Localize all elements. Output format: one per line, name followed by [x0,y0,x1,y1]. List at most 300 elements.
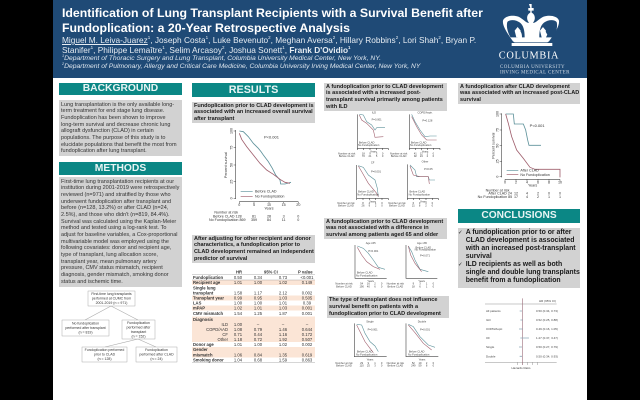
table: Cox multivariable model: 0.99 [234,296,243,300]
charts: Kaplan-Meier by age and transplant type: Before CLAD [387,364,403,368]
chart: overall survival Kaplan-Meier: Number at risk [214,211,238,215]
charts: Kaplan-Meier by diagnosis: 41 [414,152,417,156]
charts: Kaplan-Meier by age and transplant type: No Fundoplication [356,273,378,277]
chart: post-CLAD survival Kaplan-Meier: 4 [526,195,528,199]
text block: methods: underwent fundoplication after transplant and [61,199,171,205]
text block: conclusions: benefit from a fundoplication [466,276,561,284]
table: Cox multivariable model: 0.619 [302,352,313,358]
flowchart: First-time lung transplants [91,292,132,296]
charts: Kaplan-Meier by diagnosis: 92 [414,154,417,158]
charts: Kaplan-Meier by age and transplant type: 0 [381,364,383,368]
chart: post-CLAD survival Kaplan-Meier: Percent survival [491,132,495,159]
table: Cox multivariable model: Gender [193,347,208,352]
authors [62,35,476,55]
charts: Kaplan-Meier by diagnosis: Years [420,199,427,203]
charts: Kaplan-Meier by age and transplant type: Number at risk [335,282,353,286]
chart: overall survival Kaplan-Meier: 15 [282,203,286,207]
charts: Kaplan-Meier by diagnosis: No Fundoplication [410,143,432,147]
text block: methods: pressure, CMV status mismatch, recipient [61,265,163,271]
text block: conclusions: CLAD development is associated [466,236,574,244]
charts: Kaplan-Meier by diagnosis: Before CLAD [359,140,375,144]
chart: overall survival Kaplan-Meier: 20 [296,203,300,207]
chart: post-CLAD survival Kaplan-Meier: 12 [514,192,518,196]
charts: Kaplan-Meier by diagnosis: 6 [413,201,415,205]
heading: conclusions [458,209,580,222]
table: Cox multivariable model: Transplant year [193,296,224,300]
charts: Kaplan-Meier by diagnosis: 3 [419,201,421,205]
subheading: type of transplant [327,296,449,318]
chart: post-CLAD survival Kaplan-Meier: 2 [537,195,539,199]
chart: overall survival Kaplan-Meier: 0 [297,214,299,218]
charts: Kaplan-Meier by diagnosis: ILD [372,110,376,114]
subheading: overall survival: associated with an increased overall survival [194,109,313,115]
table: Cox multivariable model: 0.44 [254,332,263,337]
chart: post-CLAD survival Kaplan-Meier: 25 [496,159,500,163]
flowchart: (n = 152) [131,334,146,338]
charts: Kaplan-Meier by diagnosis: 9 [369,152,371,156]
charts: Kaplan-Meier by age and transplant type: 1 [426,282,428,286]
table: Cox multivariable model: transplant [193,290,214,296]
chart: overall survival Kaplan-Meier: P<0.001 [264,135,280,140]
chart: post-CLAD survival Kaplan-Meier: 2 [515,180,517,184]
table: Cox multivariable model: 1.59 [279,358,288,362]
charts: Kaplan-Meier by diagnosis: Before CLAD [411,140,427,144]
text block: conclusions: with an increased post-transplant [466,244,576,252]
chart: overall survival Kaplan-Meier: 28 [267,214,271,218]
table: Cox multivariable model: 1.04 [234,358,243,362]
table: Cox multivariable model: 0.172 [302,332,313,337]
text block: conclusions [458,228,580,288]
subheading: overall survival [192,102,315,122]
table: Cox multivariable model: 2.12 [279,290,288,296]
text block: conclusions: single and double lung transplants [466,268,580,276]
authors: Stanifer1, Philippe Lemaître1, Selim Arcasoy2, Joshua Sonett1, Frank D'Ovidio1 [62,45,351,55]
charts: Kaplan-Meier by diagnosis: Before CLAD [358,190,374,194]
table: Cox multivariable model: 0.68 [254,358,263,362]
table: Cox multivariable model: – [282,322,285,327]
charts: Kaplan-Meier by diagnosis: 21 [412,203,415,207]
charts: Kaplan-Meier by age and transplant type: P=0.001 [368,249,379,253]
text block: conclusions: ✓ [458,230,463,236]
chart: post-CLAD survival Kaplan-Meier: 50 [496,144,500,148]
flowchart: performed after transplant [65,326,106,330]
charts: Kaplan-Meier by age and transplant type: Years [418,279,426,283]
charts: Kaplan-Meier by diagnosis: 1 [375,201,377,205]
charts: Kaplan-Meier by diagnosis: 4 [369,201,371,205]
chart: overall survival Kaplan-Meier: No Fundoplication [255,195,284,199]
table: Cox multivariable model: 1.16 [279,332,288,337]
subheading: after CLAD: survival [460,97,481,103]
charts: Kaplan-Meier by diagnosis: Before CLAD [409,190,425,194]
table: Cox multivariable model: 0.002 [302,290,313,296]
charts: Kaplan-Meier by diagnosis: Before CLAD [338,203,354,207]
text block: methods: 2.5%), and those who didn't (n=819, 84.4%). [61,212,170,218]
table: Cox multivariable model: 95% CI [264,270,278,274]
chart: post-CLAD survival Kaplan-Meier: P<0.001 [530,123,545,128]
table: Cox multivariable model: 1.01 [234,342,243,347]
table: Cox multivariable model: 1.54 [234,311,243,316]
flowchart: 2001-2019 (n = 971) [96,301,127,305]
text block: conclusions: A fundoplication prior to or after [466,228,571,236]
charts: Kaplan-Meier by age and transplant type: Before CLAD [415,245,431,249]
chart: forest plot: HR (95% CI) [539,299,556,303]
flowchart: performed after [127,326,151,330]
table: Cox multivariable model: P value [298,270,313,274]
subheading: ILD: A fundoplication prior to CLAD development [326,84,443,90]
title: Fundoplication: a 20-Year Retrospective Analysis [62,20,350,34]
table: Cox multivariable model: LAS [193,300,202,306]
table: Cox multivariable model: 0.001 [302,306,313,310]
table: Cox multivariable model: Single lung [193,286,216,290]
charts: Kaplan-Meier by age and transplant type: Before CLAD [336,284,352,288]
chart: overall survival Kaplan-Meier: Before CLAD 128 [213,214,242,218]
chart: forest plot: 0.52 (0.25, 0.88) [536,318,558,322]
table: Cox multivariable model: 0.71 [234,332,243,337]
chart: overall survival Kaplan-Meier: 5 [253,203,255,207]
table: Cox multivariable model: – [257,322,260,327]
chart: overall survival Kaplan-Meier: 84 [267,218,271,222]
charts: Kaplan-Meier by age and transplant type: P=0.001 [420,327,430,331]
table: Cox multivariable model: 0.79 [254,327,263,332]
subheading: age 65: A fundoplication prior to CLAD development [326,218,443,224]
charts: Kaplan-Meier by age and transplant type: 0 [381,284,383,288]
text block: methods: type of transplant, lung allocation score, [61,252,158,258]
table: Cox multivariable model: Recipient age [193,280,221,285]
table: Cox multivariable model: 1.02 [279,280,288,285]
chart: overall survival Kaplan-Meier: 0 [238,203,240,207]
charts: Kaplan-Meier by age and transplant type: 249 [411,364,416,368]
table: Cox multivariable model: 1.17 [254,290,263,296]
charts: Kaplan-Meier by age and transplant type: 6 [419,284,421,288]
subheading: overall survival: Fundoplication prior to CLAD development is [194,102,314,108]
charts: Kaplan-Meier by diagnosis: Years [422,150,429,154]
chart: overall survival Kaplan-Meier: 0 [297,218,299,222]
text block: background: elucidate populations that benefit the most from [61,142,177,148]
charts: Kaplan-Meier by diagnosis: Before CLAD [391,154,407,158]
table: Cox multivariable model: 1.35 [279,352,288,358]
charts: Kaplan-Meier by age and transplant type: Before CLAD [387,284,403,288]
table: Cox multivariable model: 0.001 [302,311,313,316]
heading: background: BACKGROUND [83,83,158,94]
text block: background: Fundoplication has been shown to improve [61,115,166,121]
charts: Kaplan-Meier by diagnosis: 24 [420,154,423,158]
charts: Kaplan-Meier by age and transplant type: No Fundoplication [408,352,430,356]
table: Cox multivariable model: <0.001 [301,275,314,280]
charts: Kaplan-Meier by diagnosis: 26 [362,203,365,207]
chart: forest plot: 0.50 (0.34, 0.93) [536,354,558,358]
charts: Kaplan-Meier by age and transplant type: Years [367,358,374,362]
flowchart: (n = 819) [78,330,93,334]
chart: post-CLAD survival Kaplan-Meier: 0 [559,192,561,196]
charts: Kaplan-Meier by age and transplant type: Before CLAD [409,350,425,354]
charts: Kaplan-Meier by age and transplant type: 9 [413,282,415,286]
charts: Kaplan-Meier by diagnosis: Before CLAD [389,203,405,207]
table: Cox multivariable model: Other [218,337,229,342]
subheading: type of transplant: fundoplication prior to CLAD development [329,310,441,316]
subheading: ILD: is associated with a increased post- [326,90,421,96]
table: Cox multivariable model: 1.01 [234,280,243,285]
chart: overall survival Kaplan-Meier: 10 [267,203,271,207]
subheading: ILD: transplant survival primarily among patients [326,97,443,103]
text block: conclusions: ✓ [458,262,463,268]
table: Cox multivariable model: 1.03 [279,296,288,300]
charts: Kaplan-Meier by diagnosis: 2 [427,154,429,158]
text block: methods: method and tested using a log-rank test. To [61,225,166,231]
charts: Kaplan-Meier by age and transplant type: 0 [433,361,435,365]
chart: overall survival Kaplan-Meier: Percent survival [224,152,228,178]
text block: background: term treatment for end stage lung disease. [61,108,164,114]
subheading: age 65: was not associated with a difference in [326,225,429,231]
subheading: type of transplant: survival benefit on patients with a [329,304,418,310]
text block: methods: diagnosis, gender mismatch, smoking donor [61,272,169,278]
table: Cox multivariable model: COPD/AAD [206,327,228,332]
text block: methods: Survival was calculated using the Kaplan-Meier [61,219,176,225]
heading: background [59,83,182,95]
charts: Kaplan-Meier by diagnosis: 0 [432,203,434,207]
table: Cox multivariable model: 0.84 [254,352,263,358]
charts: Kaplan-Meier by age and transplant type: Age ≥65 [366,241,376,245]
charts: Kaplan-Meier by diagnosis: Before CLAD [339,154,355,158]
table: Cox multivariable model: Diagnosis [193,317,214,322]
charts: Kaplan-Meier by diagnosis: 1 [427,152,429,156]
charts: Kaplan-Meier by diagnosis: 18 [362,152,365,156]
text block: methods: reviewed (n=971) and stratified by those who [61,192,171,198]
flowchart: performed after CLAD [139,352,174,356]
charts: Kaplan-Meier by age and transplant type: 8 [426,364,428,368]
chart: overall survival Kaplan-Meier: 81 [252,214,256,218]
text block: methods: following covariates: donor and recipient age, [61,245,171,251]
text block: methods: before (n=128, 13.2%) or after CLAD (n=24, [61,205,168,211]
chart: post-CLAD survival Kaplan-Meier: 10 [558,180,562,184]
chart: post-CLAD survival Kaplan-Meier: 0 [548,192,550,196]
charts: Kaplan-Meier by age and transplant type: 16 [367,282,370,286]
charts: Kaplan-Meier by age and transplant type: Before CLAD [357,271,373,275]
heading: methods [59,162,182,175]
chart: overall survival Kaplan-Meier: 25 [230,180,234,184]
table: Cox multivariable model: 1.02 [234,306,243,310]
text block: methods: adjust for baseline variables, a Cox-proportional [61,232,177,238]
affiliations: 2Department of Pulmonary, Allergy and Critical Care Medicine, Columbia University Irving Medical Center, New York, NY [62,61,420,70]
charts: Kaplan-Meier by age and transplant type: 6 [374,284,376,288]
charts: Kaplan-Meier by diagnosis: Other [422,160,428,164]
table: Cox multivariable model: 1.00 [234,322,243,327]
icon: Columbia crown logo: IRVING MEDICAL CENTER [500,71,570,76]
charts: Kaplan-Meier by age and transplant type: 0 [381,282,383,286]
charts: Kaplan-Meier by age and transplant type: 0 [433,284,435,288]
charts: Kaplan-Meier by age and transplant type: Years [367,279,375,283]
heading: conclusions: CONCLUSIONS [481,210,557,221]
chart: post-CLAD survival Kaplan-Meier: After CLAD 24 [488,192,512,196]
charts: Kaplan-Meier by age and transplant type: No Fundoplication [415,248,437,252]
chart: post-CLAD survival Kaplan-Meier: 8 [548,180,550,184]
chart: post-CLAD survival Kaplan-Meier: 4 [526,192,528,196]
charts: Kaplan-Meier by age and transplant type: 18 [412,284,415,288]
table: Cox multivariable model: 1.46 [279,327,288,332]
table: Cox multivariable model: 0.644 [302,327,313,332]
subheading: after CLAD: A fundoplication after CLAD development [460,84,570,90]
chart: overall survival Kaplan-Meier: Before CLAD [255,190,277,194]
table: Cox multivariable model: 0.863 [302,358,313,362]
charts: Kaplan-Meier by diagnosis: Years [370,150,377,154]
text block: background: allograft dysfunction (CLAD) in certain [61,128,154,134]
chart: post-CLAD survival Kaplan-Meier: No Fundoplication [520,173,550,177]
table: Cox multivariable model: CMV mismatch [193,311,223,316]
charts: Kaplan-Meier by diagnosis: 0 [382,154,384,158]
flowchart: (n = 24) [150,357,163,361]
table: Cox multivariable model: 0.149 [302,280,313,285]
charts: Kaplan-Meier by age and transplant type: Number at risk [387,361,405,365]
charts: Kaplan-Meier by diagnosis: Number at risk [388,201,406,205]
chart: forest plot: CF [486,336,490,340]
chart: forest plot: 1.27 (0.37, 3.47) [536,336,558,340]
chart: post-CLAD survival Kaplan-Meier: 6 [537,180,539,184]
chart: forest plot: 0.50 (0.27, 0.79) [536,345,558,349]
charts: Kaplan-Meier by diagnosis: 0 [382,152,384,156]
charts: Kaplan-Meier by age and transplant type: 54 [360,282,364,286]
charts: Kaplan-Meier by age and transplant type: P=0.071 [420,254,430,258]
table: Cox multivariable model: Fundoplication [193,275,223,280]
charts: Kaplan-Meier by diagnosis: No Fundoplication [409,192,431,196]
table: Cox multivariable model: 1.25 [254,311,263,316]
chart: post-CLAD survival Kaplan-Meier: 2 [537,192,539,196]
charts: Kaplan-Meier by age and transplant type: 1 [374,361,376,365]
charts: Kaplan-Meier by age and transplant type: 40 [367,284,370,288]
affiliations [62,54,421,70]
text block: methods: First-time lung transplantation recipients at our [61,178,174,184]
flowchart: (n = 128) [97,357,112,361]
charts: Kaplan-Meier by age and transplant type: 0 [433,364,435,368]
chart: forest plot: Hazards Ratio [512,366,531,370]
subheading: multivariable: After adjusting for other recipient and donor [194,236,311,242]
charts: Kaplan-Meier by age and transplant type: 19 [419,361,422,365]
heading: methods: METHODS [95,163,146,174]
subheading: ILD: with ILD [326,104,348,110]
charts: Kaplan-Meier by diagnosis: No Fundoplication [357,192,379,196]
charts: Kaplan-Meier by diagnosis: COPD/Aspir. [417,110,433,114]
charts: Kaplan-Meier by diagnosis: P=0.001 [371,169,381,173]
table: Cox multivariable model: 0.95 [254,296,263,300]
charts: Kaplan-Meier by diagnosis: CF [371,160,375,164]
subheading: multivariable: CLAD development remained an independent [194,249,314,255]
charts: Kaplan-Meier by age and transplant type: Years [419,358,426,362]
chart: post-CLAD survival Kaplan-Meier: Number at risk [486,189,510,193]
table: Cox multivariable model: 1.00 [254,300,263,306]
charts: Kaplan-Meier by diagnosis: 5 [376,154,378,158]
chart: forest plot: ILD [486,318,491,322]
table: Cox multivariable model: 1.08 [234,327,243,332]
charts: Kaplan-Meier by age and transplant type: 9 [368,361,370,365]
charts: Kaplan-Meier by diagnosis: 1 [425,201,427,205]
table: Cox multivariable model: mPAP [193,306,205,310]
subheading: age 65 [324,218,447,239]
charts: Kaplan-Meier by diagnosis: 12 [420,152,423,156]
charts: Kaplan-Meier by age and transplant type: No Fundoplication [356,352,378,356]
charts: Kaplan-Meier by diagnosis: 8 [419,203,421,207]
title [62,6,483,34]
charts: Kaplan-Meier by age and transplant type: 29 [360,361,364,365]
table: Cox multivariable model: – [306,322,309,327]
table: Cox multivariable model: 1.92 [279,337,288,342]
flowchart: performed at CUMC from [92,296,131,300]
charts: Kaplan-Meier by diagnosis: 2 [425,203,427,207]
chart: post-CLAD survival Kaplan-Meier: 75 [496,128,500,132]
charts: Kaplan-Meier by age and transplant type: 2 [374,282,376,286]
table: Cox multivariable model: 1.06 [234,352,243,358]
charts: Kaplan-Meier by age and transplant type: Before CLAD [336,364,352,368]
chart: overall survival Kaplan-Meier: Years [264,207,274,211]
heading: results: RESULTS [229,84,278,96]
subheading: overall survival: after transplant [194,116,234,122]
charts: Kaplan-Meier by age and transplant type: 52 [412,361,415,365]
subheading: multivariable: characteristics, a fundoplication prior to [194,242,300,248]
table: Cox multivariable model: HR [236,270,242,274]
table: Cox multivariable model: 1.18 [234,337,243,342]
flowchart: Fundoplication performed [85,348,124,352]
charts: Kaplan-Meier by age and transplant type: 1 [426,284,428,288]
header banner [53,0,587,78]
subheading: multivariable: predictor of survival [194,256,247,262]
charts: Kaplan-Meier by diagnosis: 0 [433,154,435,158]
flowchart: Fundoplication [145,348,168,352]
table: Cox multivariable model: 1.58 [234,290,243,296]
chart: overall survival Kaplan-Meier: No Fundoplication 869 [209,218,246,222]
charts: Kaplan-Meier by age and transplant type: Age ≥65 [417,241,427,245]
charts: Kaplan-Meier by diagnosis: 0 [381,203,383,207]
charts: Kaplan-Meier by age and transplant type: 3 [419,282,421,286]
table: Cox multivariable model: 0.72 [254,337,263,342]
authors: Miguel M. Leiva-Juarez1, Joseph Costa1, Luke Bevenuto2, Meghan Aversa2, Hillary Robbins2, Lori Shah2, Bryan P. [62,35,476,45]
title: Identification of Lung Transplant Recipients with a Survival Benefit after [62,6,483,20]
chart: forest plot: Double [486,354,496,358]
charts: Kaplan-Meier by diagnosis: Number at risk [337,201,355,205]
chart: overall survival Kaplan-Meier: 3 [283,214,285,218]
table: Cox multivariable model: 1.02 [279,342,288,347]
charts: Kaplan-Meier by age and transplant type: 3 [374,364,376,368]
charts: Kaplan-Meier by diagnosis: 0 [381,201,383,205]
subheading: multivariable [192,235,315,263]
chart: forest plot: All patients [486,309,501,313]
text block: methods: multivariable model was employed using the [61,239,169,245]
chart: post-CLAD survival Kaplan-Meier: 0 [496,176,500,178]
text block: background: Lung transplantation is the only available long- [61,102,174,108]
chart: overall survival Kaplan-Meier: 50 [230,163,234,167]
chart: overall survival Kaplan-Meier: 359 [251,218,257,222]
chart: post-CLAD survival Kaplan-Meier: 4 [526,180,528,184]
charts: Kaplan-Meier by diagnosis: Number at risk [338,152,356,156]
subheading: type of transplant: The type of transplant does not influence [329,296,437,302]
table: Cox multivariable model: 1.01 [279,300,288,306]
charts: Kaplan-Meier by age and transplant type: Number at risk [335,361,353,365]
table: Cox multivariable model: Donor age [193,342,214,347]
subheading: age 65: survival among patients aged 65 and older [326,232,438,238]
table: Cox multivariable model: mismatch [193,352,213,358]
chart: post-CLAD survival Kaplan-Meier: Years [528,184,537,188]
icon: Columbia crown logo: COLUMBIA UNIVERSITY [500,65,565,70]
charts: Kaplan-Meier by diagnosis: P=0.128 [422,119,433,123]
charts: Kaplan-Meier by age and transplant type: 0 [433,282,435,286]
chart: post-CLAD survival Kaplan-Meier: No Fundoplication 85 [478,195,512,199]
charts: Kaplan-Meier by diagnosis: 3 [376,152,378,156]
chart: post-CLAD survival Kaplan-Meier: After CLAD [520,169,539,173]
subheading: after CLAD [458,83,580,104]
table: Cox multivariable model: 0.507 [302,337,313,342]
chart: overall survival Kaplan-Meier: 11 [282,218,286,222]
charts: Kaplan-Meier by age and transplant type: 59 [419,364,422,368]
chart: forest plot: COPD/Aspir. [486,327,503,331]
table: Cox multivariable model: 0.34 [254,275,263,280]
charts: Kaplan-Meier by age and transplant type: 110 [360,364,364,368]
charts: Kaplan-Meier by diagnosis: No Fundoplication [358,143,380,147]
